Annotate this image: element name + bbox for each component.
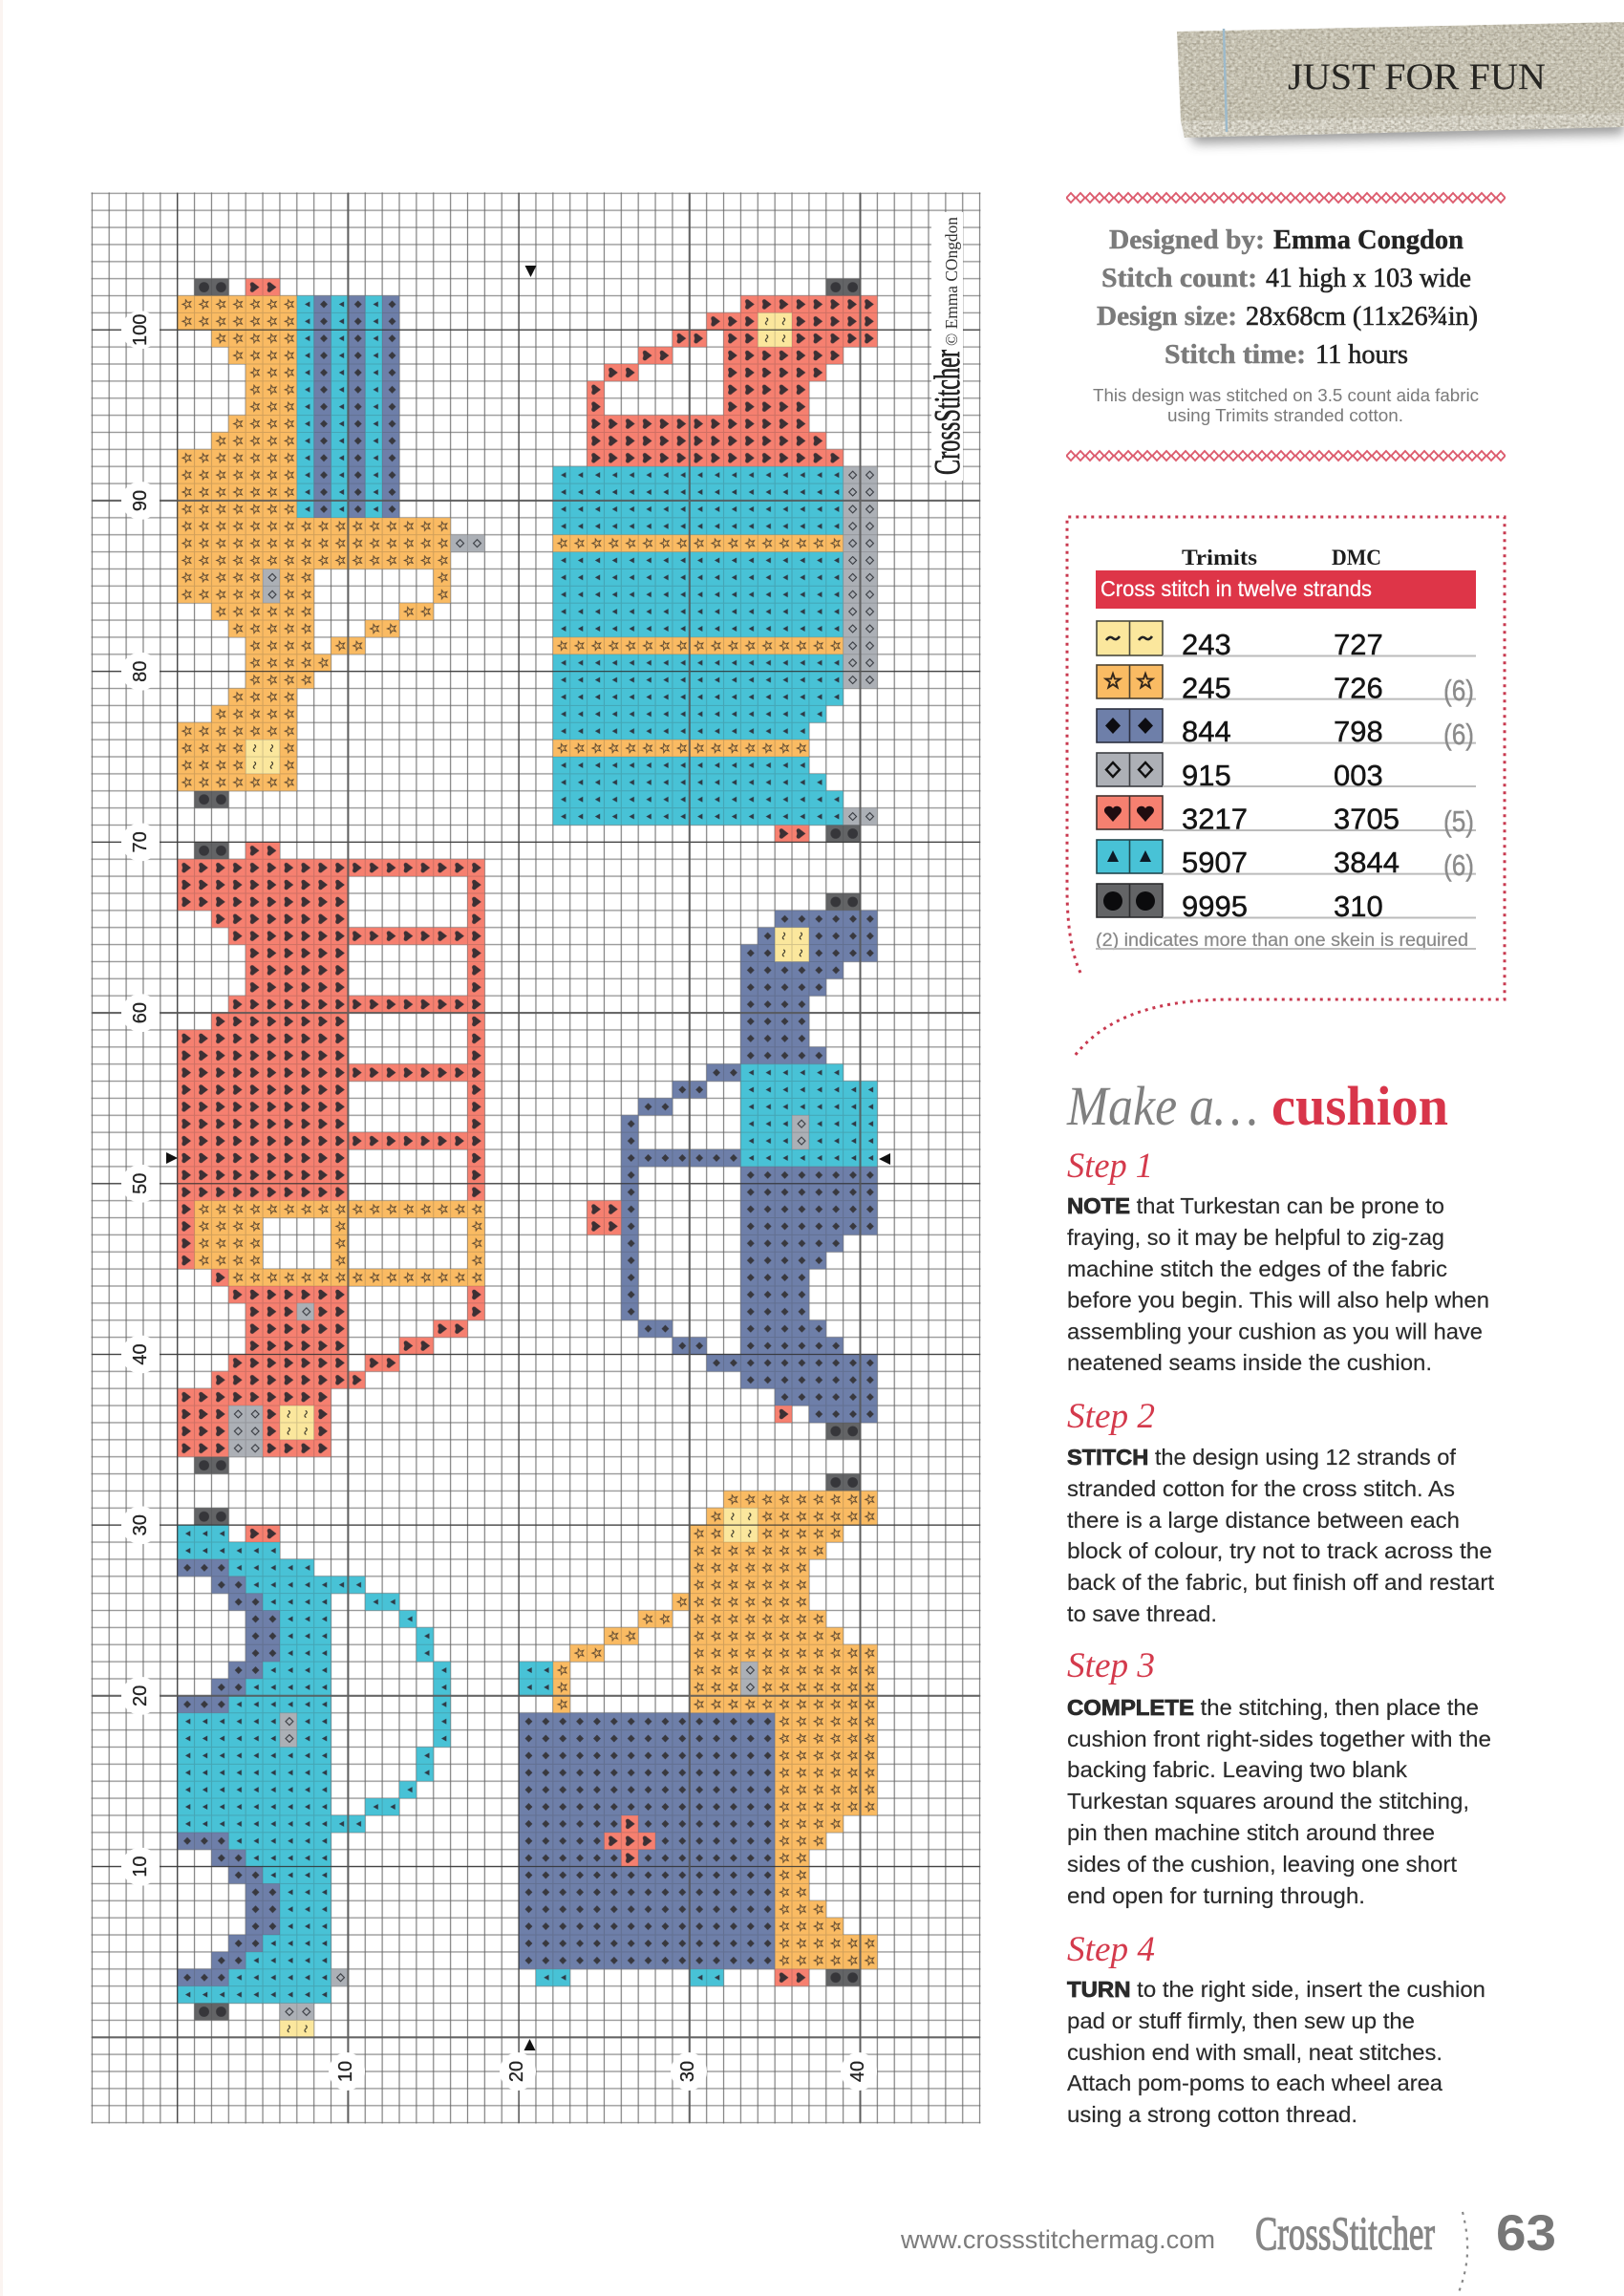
key row: 9995 [1097, 884, 1476, 923]
row number labels: 90 [130, 490, 151, 511]
footer: CrossStitcher [1255, 2206, 1435, 2260]
row number labels: 70 [130, 831, 151, 853]
column number labels: 20 [506, 2061, 527, 2082]
instructions: step 4: using a strong cotton thread. [1067, 2102, 1357, 2127]
column number labels: 30 [677, 2061, 698, 2082]
motif: red and teal carriage [553, 279, 877, 842]
key row: 844: (6) [1443, 718, 1474, 751]
instructions: step 3: end open for turning through. [1067, 1883, 1365, 1908]
instructions: step 2 [1067, 1397, 1495, 1626]
chart credit: CrossStitcher [928, 350, 968, 475]
column number labels [329, 2052, 877, 2091]
fabric note: using Trimits stranded cotton. [1167, 405, 1403, 425]
key row: 915 [1097, 753, 1476, 792]
instructions: step 1: NOTE that Turkestan can be prone to [1067, 1193, 1444, 1218]
heading: make a cushion [1066, 1075, 1448, 1137]
row number labels [121, 311, 160, 1886]
chart: cross stitch grid [91, 192, 980, 2124]
instructions: step 2: to save thread. [1067, 1601, 1217, 1626]
key row: 844 [1097, 709, 1476, 751]
key row: 5907: (6) [1443, 848, 1474, 882]
key row: 3217: 3705 [1334, 803, 1400, 835]
instructions: step 4 [1067, 1930, 1485, 2127]
motif: orange and striped carriage [178, 279, 484, 808]
instructions: step 4: Attach pom-poms to each wheel area [1067, 2071, 1442, 2095]
panel: colour key [1067, 517, 1505, 1056]
footer: 63 [1496, 2205, 1556, 2262]
instructions: step 3: Step 3 [1067, 1646, 1155, 1685]
key row: 245: (6) [1443, 674, 1474, 707]
row number labels: 40 [130, 1343, 151, 1365]
key row: 9995: 9995 [1182, 890, 1248, 923]
designed by [1109, 225, 1464, 255]
instructions: step 3: COMPLETE the stitching, then place the [1067, 1695, 1479, 1720]
key row: 243 [1097, 621, 1476, 661]
designed by: Emma Congdon [1273, 225, 1464, 255]
heading: make a cushion: cushion [1271, 1075, 1448, 1137]
instructions: step 4: pad or stuff firmly, then sew up the [1067, 2008, 1415, 2033]
row number labels: 30 [130, 1514, 151, 1535]
chart credit: © Emma COngdon [942, 217, 961, 346]
key row: 9995: 310 [1334, 890, 1383, 923]
instructions: step 2: back of the fabric, but finish off and restart [1067, 1570, 1495, 1595]
row number labels: 60 [130, 1002, 151, 1023]
key column headers: Trimits [1182, 546, 1257, 569]
header ribbon: just for fun [1177, 22, 1624, 143]
instructions: step 3: sides of the cushion, leaving one short [1067, 1852, 1458, 1877]
instructions: step 2: stranded cotton for the cross stitch. As [1067, 1476, 1455, 1501]
key red bar [1096, 570, 1476, 609]
design size: Design size: [1097, 301, 1237, 332]
motif: teal carriage [178, 1508, 451, 2037]
stitch count: Stitch count: [1101, 263, 1257, 293]
instructions: step 2: block of colour, try not to track across the [1067, 1538, 1492, 1563]
stitch time [1165, 339, 1408, 370]
instructions: step 3: backing fabric. Leaving two blank [1067, 1757, 1408, 1782]
column number labels: 40 [847, 2061, 868, 2082]
instructions: step 4: TURN to the right side, insert the cushion [1067, 1977, 1485, 2002]
instructions: step 2: STITCH the design using 12 strands of [1067, 1445, 1457, 1470]
instructions: step 1: Step 1 [1067, 1147, 1153, 1186]
key row: 245: 245 [1182, 671, 1231, 705]
stitch time: 11 hours [1315, 339, 1408, 370]
chart stitches [91, 192, 980, 2124]
instructions: step 1: neatened seams inside the cushion. [1067, 1350, 1432, 1375]
column number labels: 10 [335, 2061, 356, 2082]
key footnote: (2) indicates more than one skein is required [1096, 931, 1468, 951]
key column headers: DMC [1332, 546, 1381, 569]
row number labels: 10 [130, 1856, 151, 1878]
instructions: step 3: Turkestan squares around the stitching, [1067, 1789, 1469, 1813]
instructions: step 1: before you begin. This will also help when [1067, 1288, 1489, 1313]
key row: 5907: 5907 [1182, 846, 1248, 879]
row number labels: 50 [130, 1173, 151, 1194]
header ribbon: just for fun: JUST FOR FUN [1288, 56, 1546, 97]
key row: 844: 798 [1334, 715, 1383, 748]
footer: www.crossstitchermag.com [900, 2225, 1215, 2254]
row number labels: 80 [130, 661, 151, 682]
key row: 5907 [1097, 840, 1476, 882]
footer [900, 2205, 1556, 2292]
instructions: step 3: cushion front right-sides together with the [1067, 1727, 1491, 1751]
stitch count [1101, 263, 1471, 293]
instructions: step 2: there is a large distance between each [1067, 1508, 1460, 1533]
key column headers [1182, 546, 1381, 569]
motif: blue carriage [588, 893, 877, 1440]
row number labels: 100 [130, 314, 151, 346]
instructions: step 4: Step 4 [1067, 1930, 1155, 1969]
design size: 28x68cm (11x26¾in) [1246, 301, 1478, 332]
centre arrows [166, 266, 890, 2050]
instructions: step 1: machine stitch the edges of the fabric [1067, 1256, 1447, 1281]
key row: 5907: 3844 [1334, 846, 1400, 879]
instructions: step 1 [1067, 1147, 1489, 1375]
stitch time: Stitch time: [1165, 339, 1306, 370]
motif: orange and blue carriage [519, 1474, 877, 1986]
stitch count: 41 high x 103 wide [1266, 263, 1471, 293]
key red bar: Cross stitch in twelve strands [1100, 576, 1372, 601]
key row: 243: 243 [1182, 628, 1231, 661]
panel: design details [1066, 191, 1506, 462]
row number labels: 20 [130, 1685, 151, 1706]
key row: 245 [1097, 665, 1476, 707]
key row: 844: 844 [1182, 715, 1231, 748]
fabric note: This design was stitched on 3.5 count aida fabric [1093, 385, 1479, 405]
key row: 3217: 3217 [1182, 803, 1248, 835]
instructions: step 1: assembling your cushion as you will have [1067, 1319, 1483, 1343]
instructions: step 2: Step 2 [1067, 1397, 1155, 1436]
instructions: step 1: fraying, so it may be helpful to zig-zag [1067, 1225, 1444, 1250]
key row: 915: 003 [1334, 759, 1383, 792]
fabric note [1093, 385, 1479, 425]
heading: make a cushion: Make a… [1066, 1075, 1258, 1137]
key row: 3217 [1097, 796, 1476, 838]
key row: 245: 726 [1334, 671, 1383, 705]
instructions: step 4: cushion end with small, neat stitches. [1067, 2040, 1442, 2065]
design size [1097, 301, 1478, 332]
instructions: step 3: pin then machine stitch around three [1067, 1820, 1435, 1845]
key row: 915: 915 [1182, 759, 1231, 792]
instructions: step 3 [1067, 1646, 1491, 1908]
designed by: Designed by: [1109, 225, 1265, 255]
key row: 243: 727 [1334, 628, 1383, 661]
motif: red carriage [178, 842, 484, 1474]
key row: 3217: (5) [1443, 805, 1474, 838]
